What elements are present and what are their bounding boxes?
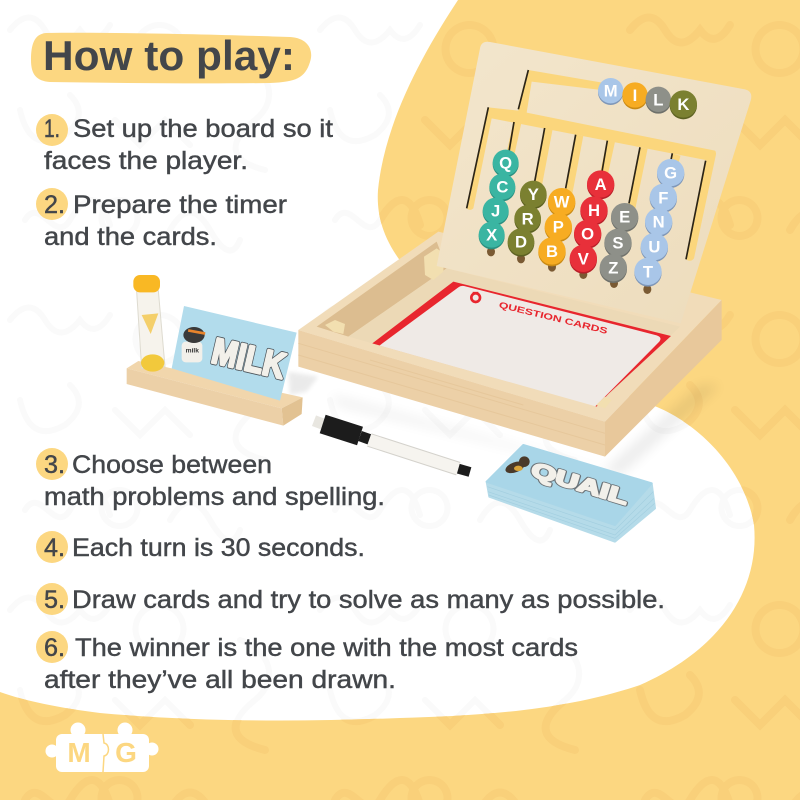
- logo: MG puzzle: G: [115, 737, 137, 768]
- step 6: after they’ve all been drawn.: [44, 666, 396, 694]
- step 1: 1.: [44, 115, 60, 143]
- beads: MILK word: [598, 78, 697, 119]
- stand end: [282, 397, 303, 426]
- slots: [508, 123, 677, 210]
- milk word: MILK: [208, 330, 290, 386]
- tray blocks: [325, 248, 612, 408]
- title: How to play:: [43, 32, 295, 79]
- hourglass: [133, 275, 165, 372]
- beads: amber column: P: [553, 218, 564, 237]
- step 6: 6.: [44, 634, 65, 662]
- beads: blue column: U: [648, 238, 660, 257]
- wooden tray with question card: [298, 232, 722, 457]
- beads: teal column: J: [491, 202, 500, 221]
- logo: MG puzzle: [46, 722, 158, 772]
- cut-out track: [467, 70, 716, 261]
- step 2: Prepare the timer: [73, 191, 287, 219]
- beads: olive column: D: [515, 233, 527, 252]
- quail card stack: [487, 445, 655, 542]
- beads: grey column: Z: [608, 259, 618, 278]
- stand shadow: [288, 372, 318, 395]
- beads: olive column: Y: [528, 185, 539, 204]
- quail word: QUAIL: [529, 458, 631, 510]
- beads: olive column: R: [522, 209, 534, 228]
- milk jar icon: milk: [186, 348, 199, 355]
- beads: MILK word: L: [653, 90, 663, 109]
- beads: MILK word: K: [677, 95, 689, 114]
- tray floor: [348, 268, 680, 407]
- step 3: [36, 448, 385, 511]
- beads: grey column: [600, 203, 638, 283]
- logo: MG puzzle: M: [67, 737, 91, 768]
- step 2: and the cards.: [44, 223, 217, 251]
- quail word: QUAIL: [529, 458, 631, 510]
- step 2: [36, 188, 287, 251]
- tray front face: [298, 330, 605, 457]
- step 1: [36, 114, 333, 175]
- beads: blue column: N: [653, 213, 665, 232]
- milk word: MILK: [208, 330, 290, 386]
- step 6: [36, 631, 578, 694]
- beads: teal column: Q: [499, 154, 512, 173]
- stand front: [127, 368, 283, 426]
- tray shadow: [330, 385, 720, 475]
- step 4: Each turn is 30 seconds.: [72, 534, 365, 562]
- beads: grey column: S: [612, 233, 624, 252]
- beads: grey column: E: [619, 208, 630, 227]
- step 5: 5.: [44, 586, 65, 614]
- step 2: 2.: [44, 191, 65, 219]
- beads: teal column: C: [496, 178, 508, 197]
- step 3: 3.: [44, 451, 65, 479]
- beads: red column: A: [595, 175, 607, 194]
- step 5: Draw cards and try to solve as many as possible.: [72, 586, 665, 614]
- step 3: math problems and spelling.: [44, 483, 385, 511]
- timer stand and milk card: [127, 275, 318, 426]
- quail word: [529, 458, 631, 510]
- peg holes: [487, 247, 651, 294]
- step 3: Choose between: [72, 451, 272, 479]
- tray inner wall: [317, 242, 447, 337]
- step 1: faces the player.: [44, 147, 248, 175]
- beads: blue column: G: [664, 164, 677, 183]
- track shadows: [467, 70, 706, 259]
- beads: red column: [570, 170, 614, 274]
- stand top: [127, 361, 303, 408]
- front rim top: [298, 330, 605, 422]
- beads: MILK word: M: [604, 82, 618, 101]
- beads: amber column: [538, 188, 575, 266]
- milk card: [172, 306, 297, 401]
- board panel: [437, 42, 751, 323]
- beads: red column: H: [588, 201, 600, 220]
- beads: blue column: T: [643, 262, 653, 281]
- beads: MILK word: I: [633, 86, 637, 105]
- card apple icon: [471, 293, 480, 302]
- beads: blue column: [634, 159, 684, 287]
- tray right face: [605, 300, 722, 457]
- tray rim top: [298, 232, 722, 422]
- beads: amber column: W: [554, 193, 570, 212]
- beads: red column: O: [581, 224, 594, 243]
- step 4: 4.: [44, 534, 65, 562]
- whiteboard marker: [314, 421, 470, 472]
- question card: [371, 282, 671, 407]
- quail bird icon: [504, 456, 530, 475]
- beads: blue column: F: [658, 188, 668, 207]
- step 1: Set up the board so it: [73, 115, 333, 143]
- letter board: [437, 42, 751, 323]
- beads: teal column: X: [486, 226, 497, 245]
- card heading: QUESTION CARDS: [498, 300, 609, 336]
- step 6: The winner is the one with the most cards: [75, 634, 578, 662]
- beads: teal column: [479, 150, 519, 249]
- beads: amber column: B: [546, 242, 558, 261]
- beads: olive column: [508, 181, 547, 257]
- beads: red column: V: [578, 249, 589, 268]
